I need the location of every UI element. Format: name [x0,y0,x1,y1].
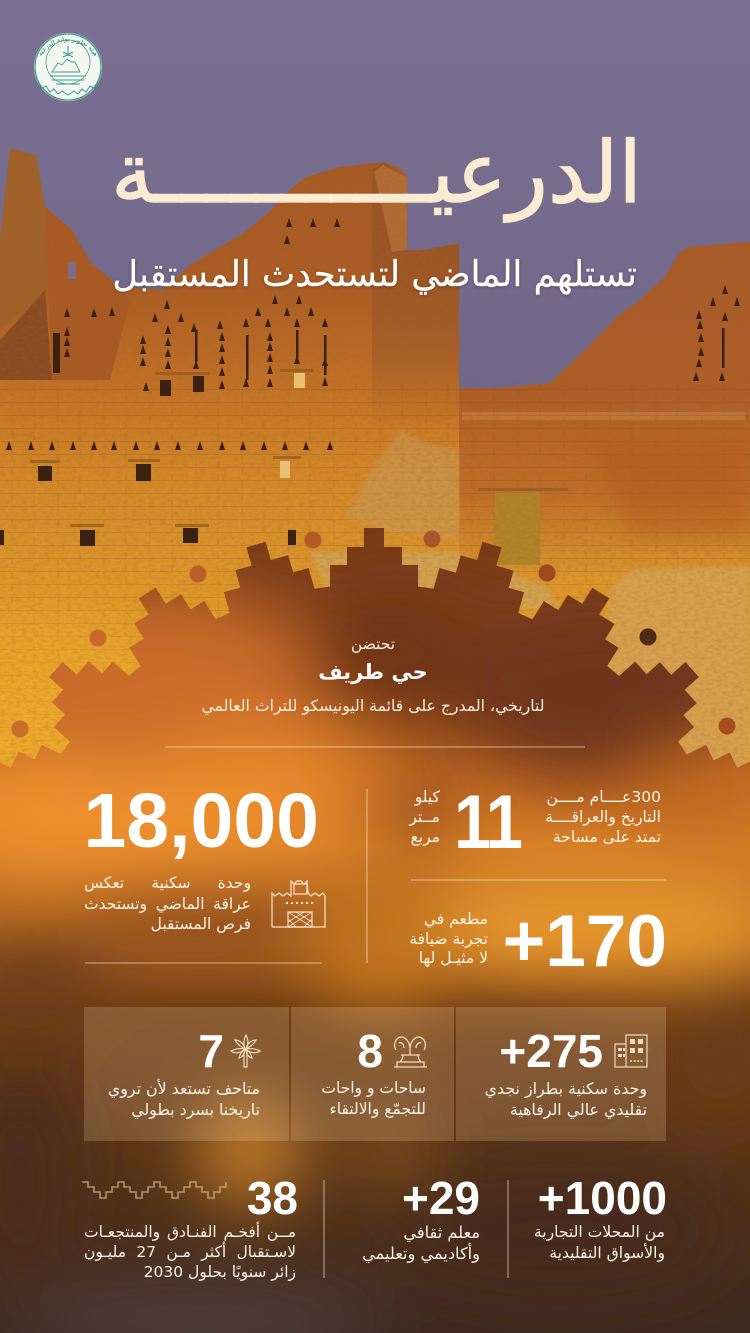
text 7: تاريخنا بسرد بطولي [131,1100,260,1119]
number 8: 8 [357,1025,383,1077]
text 29: معلم ثقافي [403,1223,480,1242]
stat: 11 sq km [408,780,661,865]
description 18,000: وحدة سكنية تعكس [84,874,251,892]
mud building walls [0,148,750,768]
gear overlay with blurred lower backdrop [0,500,750,1333]
number 18,000: 18,000 [83,778,319,864]
intro block [201,635,545,715]
description: تمتد على مساحة [553,828,661,846]
intro: UNESCO line: لتاريخي، المدرج على قائمة اليونيسكو للتراث العالمي [201,696,545,715]
stat: 1000+ shops [534,1172,667,1262]
unit [408,788,440,846]
wall lit lower glow [0,620,180,780]
stat: 18,000 [83,778,319,933]
title: الدرعيـــــــــــة [111,124,642,223]
text 38: لاسـتقبال أكثر مـن 27 مليـون [84,1243,296,1261]
stat: 170+ [409,901,667,982]
text 7: متاحف تستعد لأن تروي [108,1079,260,1098]
icon: stepped zigzag ornament [82,1182,226,1198]
text 8: للتجمّع والالتقاء [329,1100,426,1118]
text 8 [321,1079,426,1118]
description 18,000 [84,874,251,933]
logo: هيئة تطوير بوابة الدرعية [38,36,96,56]
icon: palm tree [231,1035,260,1067]
text 29: وأكاديمي وتعليمي [362,1244,480,1263]
unit: مــتر [409,808,440,826]
info panels [84,1007,666,1141]
text 7 [108,1078,260,1119]
text 8: ساحات و واحات [321,1079,426,1097]
panel: museums [108,1025,260,1119]
text 275: وحدة سكنية بطراز نجدي [485,1079,647,1098]
panel: squares and oases [321,1025,426,1118]
text 38: زائر سنويًا بحلول 2030 [144,1263,296,1281]
text 1000: والأسواق التقليدية [549,1244,665,1262]
description 170 [409,910,488,967]
number 275+: +275 [499,1025,603,1077]
icon: buildings [615,1035,647,1067]
description 170: لا مثيـل لها [419,949,488,967]
number 1000+: +1000 [538,1172,667,1224]
intro: Turaif heading: حي طريف [318,660,428,684]
number 170+: +170 [503,901,667,982]
description [545,788,661,846]
wall slits and windows [0,328,724,546]
number 29+: +29 [402,1172,480,1224]
number 11: 11 [454,780,521,865]
description 18,000: عراقة الماضي وتستحدث [84,894,251,912]
logo [34,33,102,101]
text 1000: من المحلات التجارية [534,1223,665,1241]
description 18,000: فرص المستقبل [151,915,251,933]
description 170: تجربة ضيافة [409,930,488,948]
tan pale wall pieces [346,430,459,540]
number 7: 7 [198,1025,224,1077]
text 38 [84,1222,296,1281]
wall triangular vents [6,218,740,450]
description 170: مطعم في [424,910,488,928]
stat: 38 hotels [84,1172,298,1281]
description: 300عــــام مــــن [546,788,661,806]
sky [0,0,750,480]
text 38: مــن أفخـم الفنـادق والمنتجعـات [84,1223,296,1241]
dividers [85,747,666,1278]
text 29 [362,1223,480,1263]
wall noise texture [0,374,750,766]
unit: مربع [411,828,440,846]
number 38: 38 [247,1172,298,1224]
stat: 29+ landmarks [362,1172,480,1263]
panel: residential units [485,1025,647,1119]
icon: castle [272,881,325,927]
text 275 [485,1079,647,1119]
icon: fountain [394,1037,427,1067]
description: التاريخ والعراقــــة [545,808,661,826]
gear holes [12,530,736,738]
intro: embraces: تحتضن [351,635,395,653]
unit: كيلو [415,788,440,806]
text 1000 [534,1223,665,1262]
subtitle: تستلهم الماضي لتستحدث المستقبل [112,254,637,295]
text 275: تقليدي عالي الرفاهية [510,1100,647,1119]
